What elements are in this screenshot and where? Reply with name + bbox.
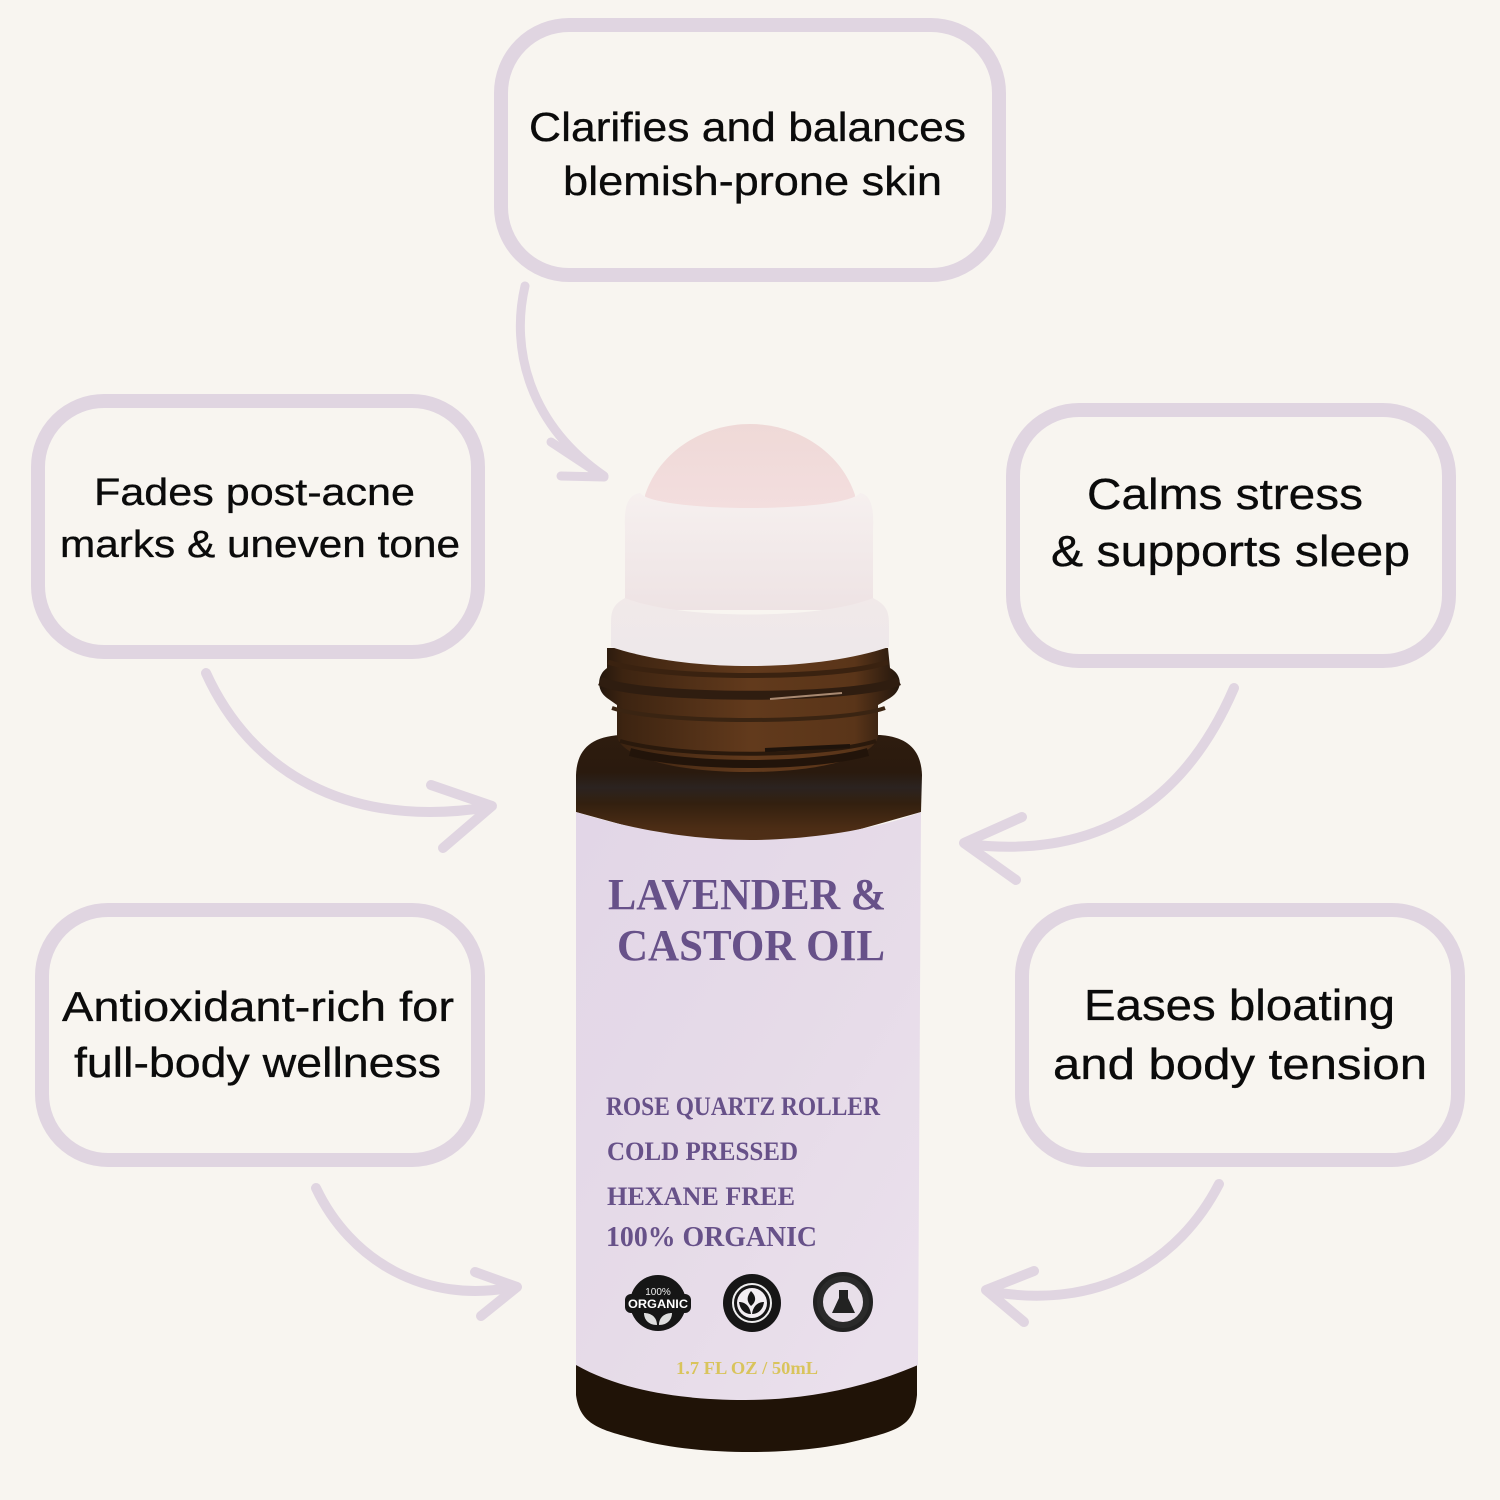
bottle shoulder xyxy=(576,735,922,860)
arrow: lower right callout to bottle xyxy=(986,1184,1219,1322)
callout: antioxidant-rich: Antioxidant-rich for xyxy=(62,983,454,1030)
label net volume: 1.7 FL OZ / 50mL xyxy=(676,1358,818,1378)
product bottle xyxy=(576,424,922,1452)
arrow: top callout to bottle xyxy=(520,286,604,477)
label title: CASTOR OIL xyxy=(617,921,885,970)
arrow: upper right callout to bottle xyxy=(964,688,1234,880)
callout: fades post-acne marks: marks & uneven tone xyxy=(60,524,460,566)
bottle label xyxy=(576,812,921,1400)
arrow: upper left callout to bottle xyxy=(206,673,492,848)
callout: clarifies and balances: blemish-prone skin xyxy=(563,158,942,204)
label feature list xyxy=(606,1092,880,1253)
label title xyxy=(608,870,886,970)
badge: plant xyxy=(723,1274,781,1332)
callout: fades post-acne marks: Fades post-acne xyxy=(94,472,415,514)
rose quartz roller ball xyxy=(645,424,855,530)
callout: calms stress xyxy=(1013,410,1449,661)
callout: antioxidant-rich xyxy=(42,910,478,1160)
callout: eases bloating: Eases bloating xyxy=(1084,981,1395,1030)
label feature list: 100% ORGANIC xyxy=(606,1222,817,1253)
roller collar xyxy=(611,598,889,666)
label feature list: COLD PRESSED xyxy=(607,1137,798,1166)
callout: calms stress: & supports sleep xyxy=(1051,527,1410,576)
badge: 100% organic: 100% xyxy=(645,1287,671,1298)
arrow: lower left callout to bottle xyxy=(316,1188,517,1316)
label title: LAVENDER & xyxy=(608,870,886,919)
callout: fades post-acne marks xyxy=(38,401,478,652)
badge: 100% organic: ORGANIC xyxy=(628,1297,688,1311)
bottle base xyxy=(576,1350,917,1452)
callout: eases bloating xyxy=(1022,910,1458,1160)
badge: 100% organic xyxy=(625,1275,691,1331)
label feature list: HEXANE FREE xyxy=(607,1182,795,1211)
callout: clarifies and balances xyxy=(501,25,999,275)
bottle neck xyxy=(599,648,900,772)
label feature list: ROSE QUARTZ ROLLER xyxy=(606,1092,880,1121)
roller cap xyxy=(625,493,873,610)
callout: antioxidant-rich: full-body wellness xyxy=(74,1039,441,1086)
badge: clinically tested xyxy=(815,1274,871,1330)
callout: calms stress: Calms stress xyxy=(1087,470,1363,519)
callout: eases bloating: and body tension xyxy=(1053,1040,1427,1089)
callout: clarifies and balances: Clarifies and balances xyxy=(529,104,966,150)
